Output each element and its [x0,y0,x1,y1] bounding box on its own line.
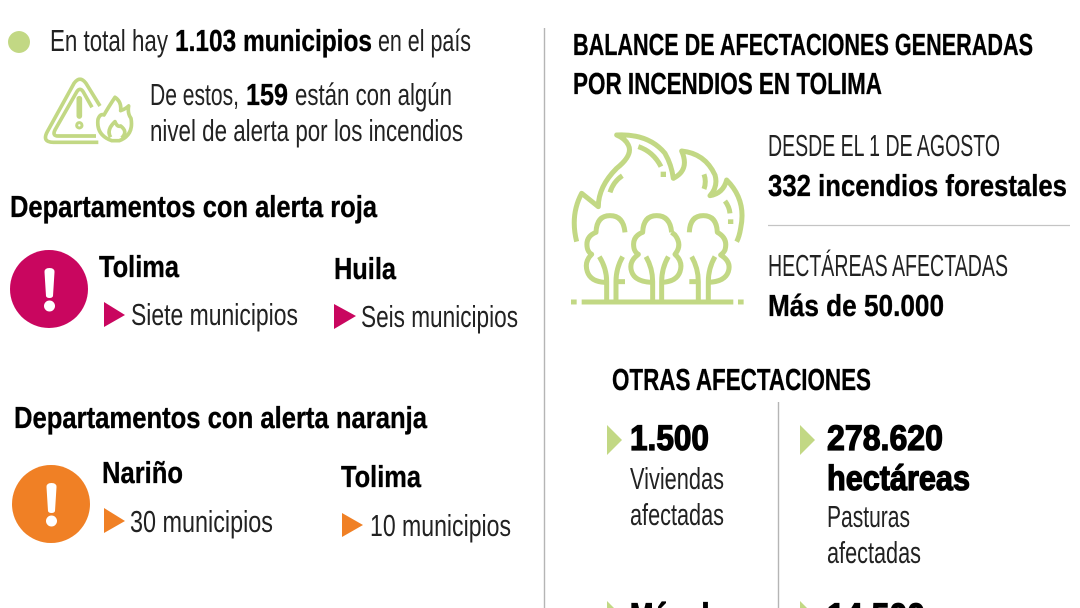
stat: pasture hectares affected: Pasturas [827,499,910,534]
panel: right column, Tolima balance [571,27,1070,608]
stat: pasture hectares affected: afectadas [827,535,921,570]
red alert: Huila [334,251,518,334]
stat: homes affected: 1.500 [630,419,709,458]
orange alert: Nariño [102,455,273,539]
text: total municipalities [50,23,471,58]
stat: hectares affected: Más de 50.000 [768,288,944,323]
icon: red alert circle [10,250,88,328]
text: 159 municipalities on alert: nivel de alerta por los incendios [150,113,463,148]
text: total municipalities: 1.103 municipios [175,23,372,58]
text: total municipalities: En total hay [50,23,168,58]
orange alert: Tolima: Tolima [341,459,422,494]
stat: homes affected [607,419,724,532]
heading: other effects: OTRAS AFECTACIONES [612,362,871,397]
red alert: Huila: Seis municipios [361,299,518,334]
heading: orange alert: Departamentos con alerta naranja [14,400,428,435]
icon: forest on fire [571,135,744,302]
text: 159 municipalities on alert: 159 [246,77,288,112]
text: total municipalities: en el país [378,23,471,58]
heading: red alert: Departamentos con alerta roja [10,189,378,224]
stat: fires since August 1 [768,128,1067,203]
red alert: Tolima: Siete municipios [131,297,298,332]
text: 159 municipalities on alert [150,77,463,148]
icon: orange alert circle [12,465,90,543]
stat: pasture hectares affected: 278.620 [827,419,943,458]
orange alert: Tolima: 10 municipios [370,508,511,543]
heading: balance: POR INCENDIOS EN TOLIMA [573,66,882,101]
stat: homes affected: afectadas [630,497,724,532]
panel: left column, alert summary [8,23,518,543]
red alert: Tolima [99,249,298,332]
stat: cut-off "Más de" [607,597,725,608]
orange alert: Tolima [341,459,511,543]
stat: homes affected: Viviendas [630,461,724,496]
red alert: Huila: Huila [334,251,397,286]
orange alert: Nariño: Nariño [102,455,183,490]
stat: hectares affected [768,248,1008,323]
text: 159 municipalities on alert: De estos, [150,77,239,112]
bullet dot [8,31,30,53]
red alert: Tolima: Tolima [99,249,180,284]
stat: pasture hectares affected: hectáreas [827,459,970,498]
stat: pasture hectares affected [800,419,970,570]
heading: balance [573,27,1033,101]
orange alert: Nariño: 30 municipios [130,504,273,539]
text: 159 municipalities on alert: están con algún [295,77,452,112]
icon: warning triangle with flame [45,79,131,142]
